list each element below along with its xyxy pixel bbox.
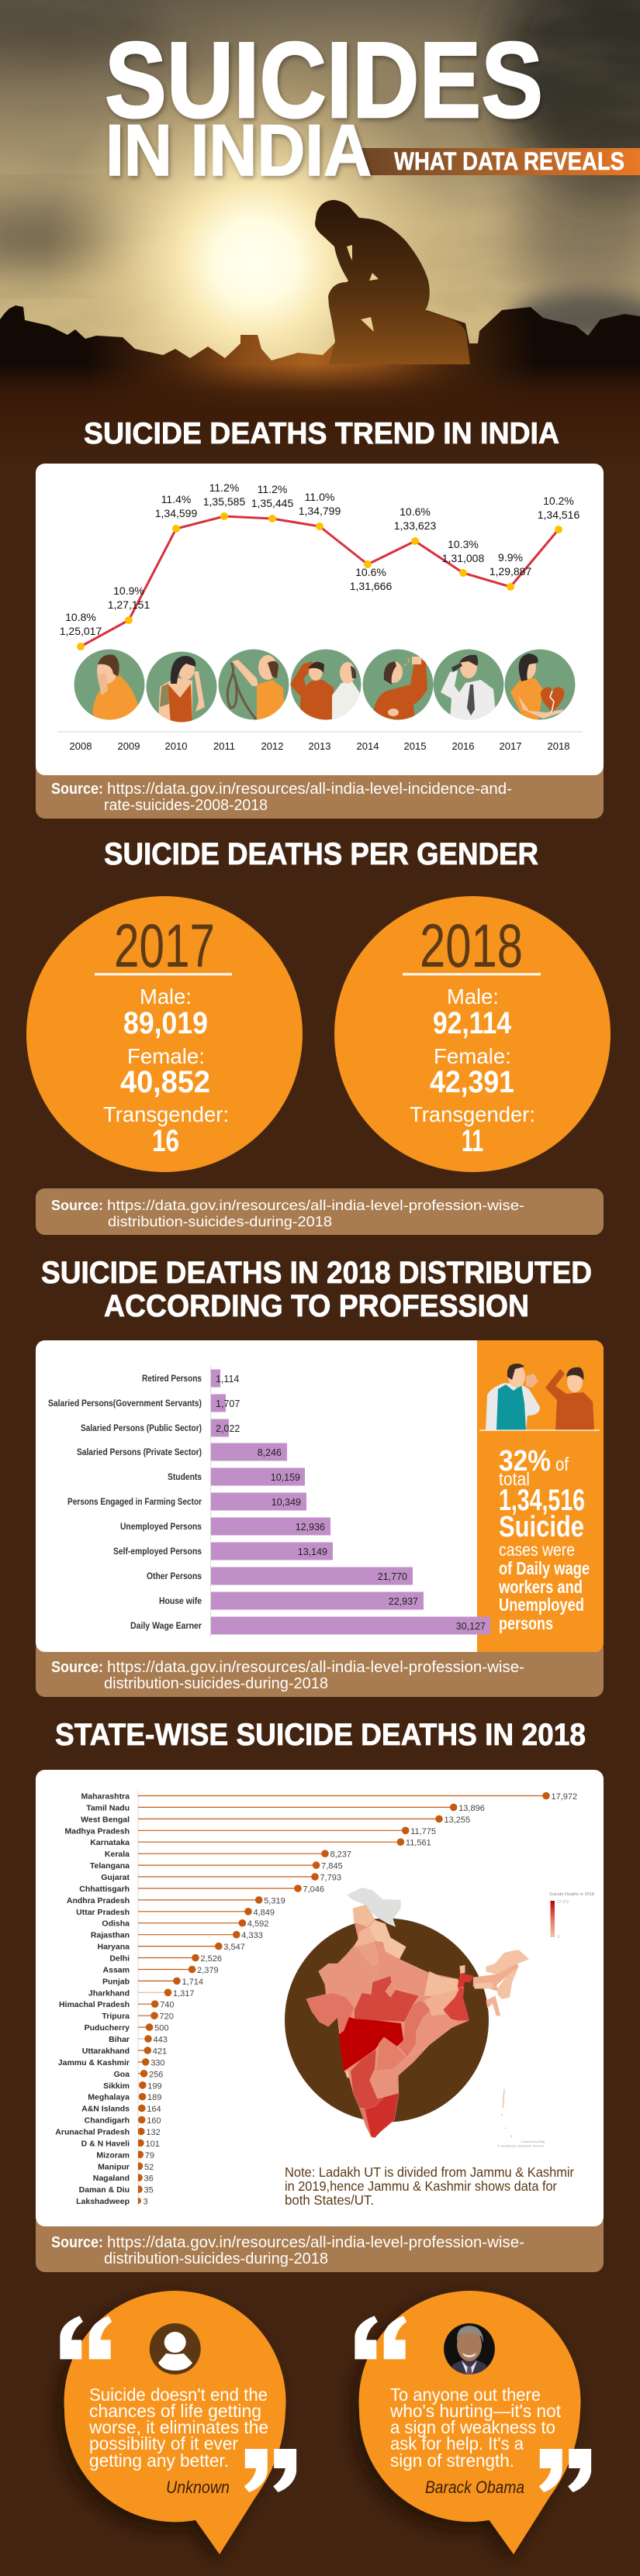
icon: man holding noose bbox=[219, 650, 289, 720]
person silhouette bbox=[315, 200, 470, 364]
chart: state names: Uttar Pradesh bbox=[76, 1908, 130, 1917]
heading: profession bbox=[41, 1256, 592, 1323]
bar category labels bbox=[48, 1373, 202, 1631]
silhouette light gaps bbox=[347, 245, 379, 332]
icon: woman with head in hand bbox=[146, 651, 217, 722]
brown circle behind map bbox=[285, 1918, 489, 2123]
quote text: a sign of weakness to bbox=[390, 2417, 555, 2437]
chart: state values: 35 bbox=[144, 2186, 154, 2195]
bar values: 21,770 bbox=[378, 1571, 407, 1582]
bars bbox=[211, 1369, 490, 1634]
chart: state names: Sikkim bbox=[103, 2081, 130, 2091]
quote text: ask for help. It's a bbox=[390, 2433, 524, 2454]
callout: 32 percent: cases were bbox=[499, 1540, 575, 1560]
data labels: 11.2% bbox=[258, 483, 287, 495]
chart: state values: 5,319 bbox=[264, 1896, 285, 1905]
panel: 2017 gender circle: 40,852 bbox=[120, 1065, 210, 1099]
bar category labels: Salaried Persons (Private Sector) bbox=[77, 1447, 202, 1457]
data labels: 1,34,799 bbox=[299, 505, 341, 517]
quote text: To anyone out there bbox=[390, 2385, 541, 2405]
chart: state names: Rajasthan bbox=[91, 1931, 130, 1940]
source: state-wise: distribution-suicides-during-2018 bbox=[104, 2250, 328, 2267]
chart: state values: 3 bbox=[143, 2197, 148, 2206]
chart: state names: Daman & Diu bbox=[79, 2185, 130, 2195]
chart: state names: Madhya Pradesh bbox=[65, 1826, 130, 1836]
map credit bbox=[497, 2140, 545, 2147]
chart: state values: 132 bbox=[146, 2128, 161, 2137]
panel: source band for trend chart: https://data.gov.in/resources/all-india-level-incidence-and- bbox=[107, 781, 512, 798]
bubble shadow bbox=[352, 2298, 574, 2558]
chart: state names: Jammu & Kashmir bbox=[58, 2058, 130, 2067]
data labels: 11.4% bbox=[161, 493, 191, 505]
chart: state values: 256 bbox=[149, 2070, 163, 2079]
data points bbox=[77, 512, 562, 650]
x axis years bbox=[70, 740, 569, 752]
bar values: 10,159 bbox=[271, 1472, 300, 1483]
chart: state values: 2,526 bbox=[200, 1954, 222, 1964]
quote text bbox=[389, 2385, 562, 2471]
data labels: 10.6% bbox=[355, 566, 386, 578]
callout: 32 percent: 1,34,516 bbox=[499, 1484, 585, 1517]
bar category labels: Retired Persons bbox=[142, 1373, 202, 1384]
panel: 2018 gender circle: 42,391 bbox=[430, 1065, 514, 1099]
chart: state values: 13,896 bbox=[458, 1804, 485, 1813]
bar category labels: Students bbox=[168, 1471, 202, 1482]
chart: state names: Haryana bbox=[98, 1943, 130, 1952]
bar values bbox=[216, 1374, 486, 1632]
source: profession bbox=[36, 1640, 604, 1697]
line chart bbox=[81, 516, 559, 647]
icon: man with gun bbox=[433, 650, 504, 720]
icon: two worried men bbox=[486, 1364, 594, 1430]
chart: state values: 17,972 bbox=[551, 1792, 577, 1802]
chart: state values: 330 bbox=[150, 2058, 165, 2067]
bar values: 22,937 bbox=[389, 1596, 418, 1607]
note text: both States/UT. bbox=[285, 2192, 374, 2208]
tree line silhouette bbox=[0, 305, 640, 419]
panel: 2018 gender circle bbox=[334, 896, 611, 1172]
quote text: worse, it eliminates the bbox=[88, 2417, 268, 2437]
x axis years: 2013 bbox=[309, 740, 330, 752]
chart: state values bbox=[143, 1792, 577, 2206]
chart: state names: Chhattisgarh bbox=[79, 1885, 130, 1894]
source: gender: distribution-suicides-during-2018 bbox=[108, 1214, 332, 1229]
callout: 32 percent: persons bbox=[499, 1613, 553, 1633]
note text: in 2019,hence Jammu & Kashmir shows data for bbox=[285, 2178, 557, 2194]
chart: state values: 52 bbox=[144, 2163, 154, 2172]
data labels: 10.6% bbox=[400, 505, 431, 518]
map legend: 3 bbox=[557, 1935, 559, 1940]
source: profession: https://data.gov.in/resources/all-india-level-profession-wise- bbox=[107, 1659, 524, 1676]
chart: state names: Arunachal Pradesh bbox=[55, 2127, 130, 2136]
title: IN INDIA: IN INDIA bbox=[106, 109, 372, 191]
callout: 32 percent: Suicide bbox=[499, 1511, 584, 1543]
chart: state names: Goa bbox=[114, 2070, 130, 2079]
chart: state names: Mizoram bbox=[96, 2150, 130, 2160]
source: state-wise: Source: bbox=[51, 2234, 103, 2251]
data labels: 10.8% bbox=[65, 611, 96, 623]
callout: 32 percent: Unemployed bbox=[499, 1595, 584, 1615]
chart: state values: 189 bbox=[147, 2093, 161, 2102]
data labels: 1,35,445 bbox=[251, 497, 293, 509]
bar values: 13,149 bbox=[298, 1547, 327, 1557]
data labels: 11.0% bbox=[305, 491, 334, 503]
map of India choropleth bbox=[306, 1888, 529, 2138]
x axis years: 2015 bbox=[404, 740, 426, 752]
note text bbox=[285, 2164, 574, 2208]
chart: state names: Assam bbox=[103, 1966, 130, 1975]
chart: state names: Tamil Nadu bbox=[86, 1803, 130, 1812]
chart: state values: 443 bbox=[154, 2036, 168, 2045]
map credit: © GeoNames, Microsoft, TomTom bbox=[497, 2144, 545, 2147]
chart: state names: Meghalaya bbox=[88, 2093, 130, 2102]
data labels: 1,35,585 bbox=[203, 495, 245, 508]
quote text: who's hurting—it's not bbox=[389, 2401, 562, 2421]
panel: source band for trend chart bbox=[36, 760, 604, 819]
bar values: 8,246 bbox=[258, 1447, 282, 1458]
data labels bbox=[60, 481, 579, 637]
quote text bbox=[88, 2385, 268, 2471]
callout: 32 percent: total bbox=[499, 1469, 530, 1490]
x axis years: 2010 bbox=[165, 740, 187, 752]
chart: state names: Maharashtra bbox=[81, 1792, 130, 1802]
icon: man drinking poison bbox=[363, 650, 433, 720]
panel: source band for trend chart: rate-suicides-2008-2018 bbox=[104, 797, 268, 814]
map legend: Suicide Deaths in 2018 bbox=[549, 1892, 594, 1897]
bar values: 30,127 bbox=[456, 1621, 486, 1632]
chart: state values: 1,317 bbox=[173, 1989, 195, 1998]
panel: 2018 gender circle: Transgender: bbox=[410, 1102, 535, 1126]
icon: anonymous avatar bbox=[150, 2323, 201, 2374]
chart: state values: 13,255 bbox=[444, 1816, 470, 1825]
x axis years: 2008 bbox=[70, 740, 92, 752]
data labels: 1,31,008 bbox=[442, 552, 484, 564]
hero: sunset photo with silhouette bbox=[0, 0, 640, 467]
chart: state names: D & N Haveli bbox=[81, 2139, 130, 2148]
icon: two men, stressed bbox=[290, 650, 362, 720]
chart: state values: 7,793 bbox=[320, 1873, 341, 1882]
chart: state values: 79 bbox=[145, 2151, 154, 2160]
chart: state values: 7,845 bbox=[321, 1862, 343, 1871]
map credit: Powered by Bing bbox=[521, 2140, 545, 2143]
heading: gender: SUICIDE DEATHS PER GENDER bbox=[104, 837, 538, 871]
chart: state values: 199 bbox=[147, 2081, 162, 2091]
chart: state values: 164 bbox=[147, 2105, 161, 2114]
x axis years: 2014 bbox=[357, 740, 379, 752]
portrait: Barack Obama bbox=[444, 2323, 495, 2375]
callout: 32 percent bbox=[498, 1445, 590, 1633]
chart: state values: 101 bbox=[146, 2140, 160, 2149]
note text: Note: Ladakh UT is divided from Jammu & Kashmir bbox=[285, 2164, 574, 2180]
x axis years: 2012 bbox=[261, 740, 283, 752]
panel: 2017 gender circle bbox=[26, 896, 303, 1172]
chart: state names: Punjab bbox=[102, 1977, 130, 1986]
chart: state names: Karnataka bbox=[90, 1838, 130, 1847]
chart: state names bbox=[55, 1792, 130, 2206]
quote author: Barack Obama bbox=[425, 2478, 524, 2497]
chart: state names: Tripura bbox=[102, 2012, 130, 2021]
bar category labels: Persons Engaged in Farming Sector bbox=[67, 1496, 202, 1507]
chart: lollipop lines and dots bbox=[135, 1792, 550, 2204]
panel: 2017 gender circle: Female: bbox=[127, 1044, 205, 1068]
bubble shadow bbox=[57, 2298, 279, 2558]
data labels: 9.9% bbox=[498, 551, 523, 564]
data labels: 10.9% bbox=[113, 585, 144, 597]
heading: profession: SUICIDE DEATHS IN 2018 DISTRIBUTED bbox=[41, 1256, 592, 1290]
x axis years: 2009 bbox=[118, 740, 140, 752]
quote text: sign of strength. bbox=[390, 2450, 514, 2471]
panel: 2017 gender circle: 89,019 bbox=[123, 1006, 208, 1040]
panel: 2017 gender circle: Male: bbox=[140, 985, 192, 1009]
x axis years: 2018 bbox=[548, 740, 569, 752]
heading: state-wise: STATE-WISE SUICIDE DEATHS IN 2018 bbox=[55, 1718, 586, 1752]
quote text: chances of life getting bbox=[89, 2401, 261, 2421]
heading: trend: SUICIDE DEATHS TREND IN INDIA bbox=[84, 417, 559, 450]
quote text: getting any better. bbox=[89, 2450, 229, 2471]
icon: woman with broken heart bbox=[504, 650, 576, 720]
panel: 2018 gender circle: Female: bbox=[434, 1044, 511, 1068]
source: gender: https://data.gov.in/resources/all-india-level-profession-wise- bbox=[107, 1198, 524, 1213]
chart: state names: A&N Islands bbox=[81, 2105, 130, 2114]
source: state-wise bbox=[36, 2213, 604, 2272]
quote author: Unknown bbox=[166, 2478, 230, 2497]
panel: source band for trend chart: Source: bbox=[51, 781, 103, 798]
data labels: 1,29,887 bbox=[490, 565, 531, 578]
x axis years: 2016 bbox=[452, 740, 474, 752]
panel: profession chart bbox=[36, 1340, 604, 1652]
data labels: 1,33,623 bbox=[394, 519, 436, 532]
chart: state names: Delhi bbox=[109, 1954, 130, 1963]
chart: state names: Odisha bbox=[102, 1919, 130, 1929]
quote text: possibility of it ever bbox=[89, 2433, 238, 2454]
source: profession: Source: bbox=[51, 1659, 103, 1676]
bar category labels: Salaried Persons (Public Sector) bbox=[81, 1422, 202, 1433]
data labels: 1,27,151 bbox=[108, 598, 150, 611]
panel: 2018 gender circle: 2018 bbox=[420, 911, 523, 980]
quote marks bbox=[355, 2316, 591, 2492]
chart: state names: Telangana bbox=[90, 1861, 130, 1871]
x axis years: 2017 bbox=[500, 740, 521, 752]
chart: state values: 500 bbox=[154, 2024, 168, 2033]
panel: 2018 gender circle: 92,114 bbox=[433, 1006, 512, 1040]
panel: trend chart bbox=[36, 464, 604, 775]
bar category labels: Daily Wage Earner bbox=[130, 1620, 202, 1631]
chart: state names: Himachal Pradesh bbox=[59, 2000, 130, 2009]
quote text: Suicide doesn't end the bbox=[89, 2385, 268, 2405]
panel: 2018 gender circle: 11 bbox=[462, 1124, 483, 1158]
data labels: 1,34,599 bbox=[155, 507, 197, 519]
chart: state names: Andhra Pradesh bbox=[67, 1896, 130, 1905]
callout: 32 percent: of bbox=[555, 1454, 569, 1475]
bar values: 10,349 bbox=[272, 1497, 301, 1508]
icon: man covering face bbox=[74, 650, 144, 720]
map legend: 17,972 bbox=[557, 1900, 569, 1905]
title: SUICIDES: SUICIDES bbox=[105, 20, 543, 140]
panel: 2017 gender circle: Transgender: bbox=[103, 1102, 229, 1126]
chart: state values: 8,237 bbox=[330, 1850, 351, 1860]
chart: state values: 36 bbox=[144, 2174, 154, 2184]
bar category labels: Self-employed Persons bbox=[113, 1546, 202, 1557]
panel: 2017 gender circle: 16 bbox=[152, 1124, 179, 1158]
callout: 32 percent: of Daily wage bbox=[499, 1558, 590, 1578]
quote bubble: Barack Obama bbox=[352, 2291, 591, 2558]
heading: profession: ACCORDING TO PROFESSION bbox=[104, 1289, 529, 1323]
chart: state names: Nagaland bbox=[93, 2174, 130, 2183]
orange side panel bbox=[477, 1340, 604, 1652]
quote marks bbox=[60, 2316, 296, 2492]
bar values: 2,022 bbox=[216, 1423, 240, 1434]
bar category labels: Unemployed Persons bbox=[120, 1521, 202, 1532]
chart: state values: 4,333 bbox=[241, 1931, 263, 1940]
chart: state values: 7,046 bbox=[303, 1885, 324, 1895]
chart: state names: Uttarakhand bbox=[82, 2047, 130, 2056]
chart: state values: 3,547 bbox=[223, 1943, 245, 1952]
chart: state names: Lakshadweep bbox=[76, 2197, 130, 2206]
data labels: 1,25,017 bbox=[60, 625, 102, 637]
data labels: 10.3% bbox=[448, 538, 479, 550]
callout: 32 percent: 32% bbox=[499, 1445, 551, 1478]
chart: state names: Bihar bbox=[109, 2035, 130, 2044]
chart: state values: 421 bbox=[153, 2047, 167, 2056]
x axis years: 2011 bbox=[213, 740, 235, 752]
chart: state names: Chandigarh bbox=[85, 2116, 130, 2126]
chart: state names: Manipur bbox=[98, 2162, 130, 2171]
source: state-wise: https://data.gov.in/resources/all-india-level-profession-wise- bbox=[107, 2234, 524, 2251]
map legend bbox=[549, 1892, 594, 1940]
source: gender bbox=[36, 1188, 604, 1235]
chart: state names: West Bengal bbox=[81, 1815, 130, 1824]
bar values: 1,707 bbox=[216, 1398, 240, 1409]
panel: 2017 gender circle: 2017 bbox=[114, 911, 215, 980]
chart: state values: 11,561 bbox=[406, 1839, 431, 1848]
chart: state values: 1,714 bbox=[182, 1978, 203, 1987]
source: gender: Source: bbox=[51, 1198, 103, 1213]
speech bubble bbox=[64, 2291, 286, 2554]
chart: state values: 4,592 bbox=[247, 1919, 268, 1929]
data labels: 1,31,666 bbox=[350, 580, 392, 592]
data labels: 10.2% bbox=[543, 495, 574, 507]
bar category labels: House wife bbox=[159, 1595, 202, 1606]
bar category labels: Salaried Persons(Government Servants) bbox=[48, 1398, 202, 1409]
chart: state values: 2,379 bbox=[197, 1966, 219, 1975]
quote bubble: Unknown bbox=[57, 2291, 296, 2558]
chart: state names: Gujarat bbox=[101, 1873, 130, 1882]
chart: state values: 4,849 bbox=[253, 1908, 275, 1917]
bar values: 1,114 bbox=[216, 1374, 239, 1385]
chart: state names: Jharkhand bbox=[88, 1988, 130, 1998]
chart: state values: 160 bbox=[147, 2116, 161, 2126]
panel: 2018 gender circle: Male: bbox=[447, 985, 499, 1009]
chart: state values: 11,775 bbox=[410, 1827, 436, 1836]
bar category labels: Other Persons bbox=[147, 1571, 202, 1581]
speech bubble bbox=[359, 2291, 580, 2554]
bar values: 12,936 bbox=[296, 1522, 325, 1533]
data labels: 1,34,516 bbox=[538, 509, 579, 521]
chart: state values: 740 bbox=[160, 2001, 175, 2010]
panel: state-wise chart and map bbox=[36, 1770, 604, 2226]
chart: state names: Kerala bbox=[105, 1850, 130, 1859]
callout: 32 percent: workers and bbox=[498, 1577, 583, 1597]
chart: state values: 720 bbox=[160, 2012, 174, 2022]
chart: state names: Puducherry bbox=[85, 2023, 130, 2033]
data labels: 11.2% bbox=[209, 481, 239, 494]
source: profession: distribution-suicides-during-2018 bbox=[104, 1675, 328, 1692]
